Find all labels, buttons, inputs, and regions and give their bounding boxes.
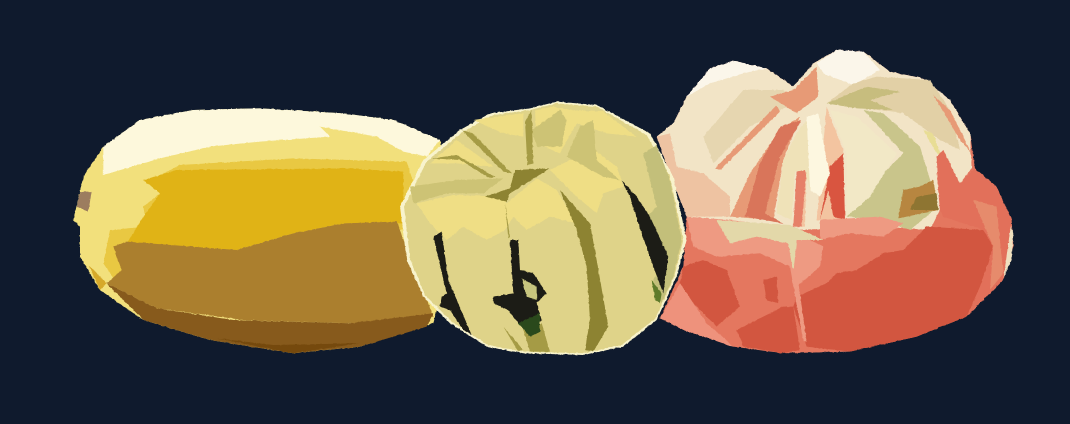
right squash: coral and cream (657, 50, 1013, 353)
middle squash: delicata (400, 102, 687, 355)
left squash: spaghetti squash (73, 108, 460, 353)
